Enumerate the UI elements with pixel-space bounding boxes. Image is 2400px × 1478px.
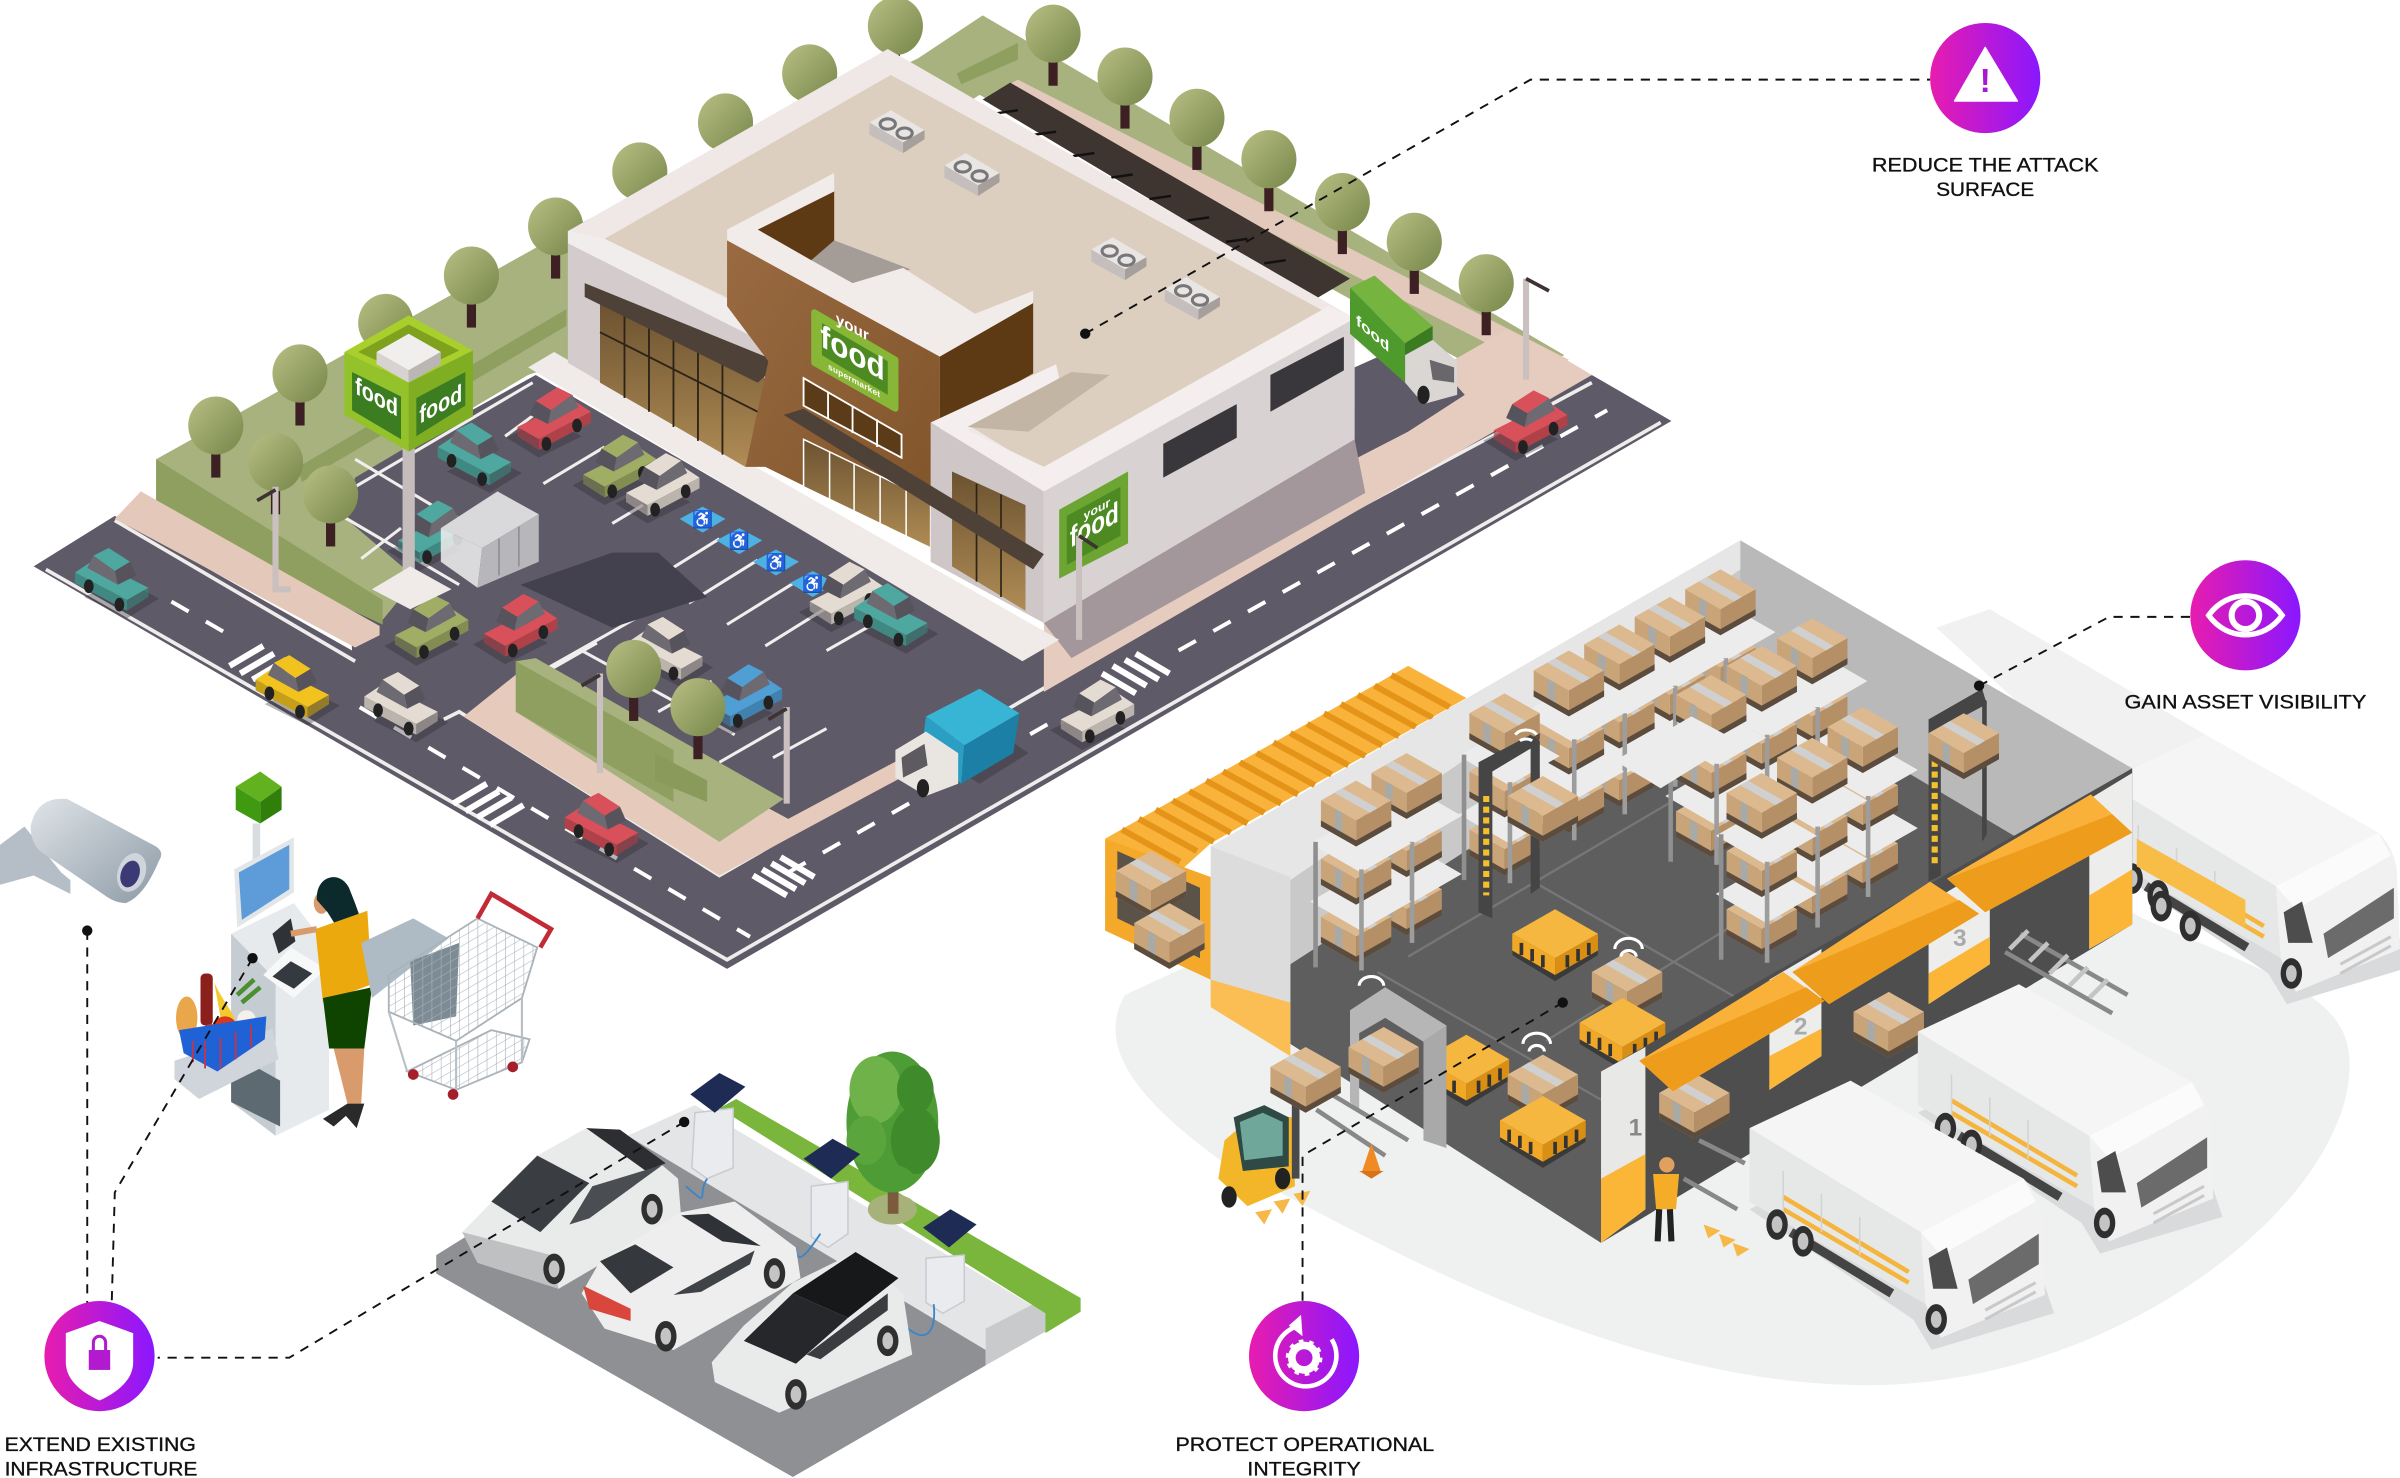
- connector: checkout: [112, 953, 258, 1303]
- shopper: [291, 877, 372, 1128]
- green delivery truck: food: [1356, 311, 1389, 356]
- callout: protect operational integrity: [1176, 1301, 1434, 1456]
- grocery basket: [176, 973, 266, 1071]
- wifi signals: [1359, 730, 1642, 1052]
- lower planting island: [464, 673, 918, 876]
- security camera: [0, 799, 161, 903]
- forklift: [1218, 1047, 1341, 1208]
- connector: reduce the attack surface: [1080, 80, 1930, 339]
- panel: supermarket scene: [34, 0, 1671, 969]
- kiosk screen: [234, 837, 294, 928]
- EV charging scene: [436, 1052, 1081, 1477]
- chargers: [686, 1073, 977, 1335]
- callout: gain asset visibility: [2124, 560, 2367, 714]
- dock awnings: [1639, 794, 2132, 1091]
- island trees and lamp posts: [248, 279, 1549, 804]
- label: REDUCE THE ATTACK: [1872, 155, 2099, 176]
- kiosk pole and cube: [253, 823, 260, 869]
- icon: gear with arrow: [1249, 1301, 1359, 1411]
- food sign on facade: supermarket: [828, 361, 880, 399]
- pylon food sign: food: [419, 378, 462, 430]
- food sign on side wall: your: [1084, 495, 1110, 523]
- food sign on facade: food: [820, 318, 885, 389]
- robots carrying boxes: [1348, 909, 1665, 1168]
- pylon food sign: food: [355, 371, 398, 423]
- accessible parking bays: ♿: [802, 573, 823, 593]
- tree: [846, 1052, 940, 1225]
- food sign on side wall: [1059, 471, 1128, 579]
- connector: EV charging: [158, 1117, 689, 1358]
- worker: [1653, 1157, 1679, 1241]
- pylon food sign: [344, 315, 473, 609]
- traffic cone: [1359, 1143, 1384, 1179]
- zebra crossings: [230, 646, 1169, 895]
- trees: [188, 0, 1514, 478]
- roof vents: [869, 110, 1220, 320]
- EV car 3: [712, 1252, 912, 1413]
- supermarket building: [568, 49, 1355, 623]
- accessible parking bays: ♿: [766, 552, 786, 572]
- panel: warehouse scene: [1105, 540, 2400, 1385]
- accessible parking bays: [680, 507, 836, 597]
- callout: reduce the attack surface: [1872, 23, 2099, 176]
- food sign on facade: [814, 310, 895, 409]
- garbage truck: [895, 689, 1029, 797]
- asphalt roads and parking lot: [34, 375, 1671, 969]
- EV car 1: [462, 1128, 681, 1289]
- accessible parking bays: ♿: [692, 509, 713, 529]
- orange container: [1105, 666, 1466, 980]
- hedge: [156, 459, 383, 625]
- right sidewalk and loading bay: [1044, 329, 1592, 692]
- white plinth: [528, 352, 1059, 661]
- label: EXTEND EXISTING: [5, 1435, 196, 1456]
- icon: eye: [2190, 560, 2301, 670]
- dock wall and openings: 1: [1629, 1115, 1642, 1142]
- label: PROTECT OPERATIONAL: [1176, 1435, 1434, 1456]
- icon: warning triangle: !: [1980, 63, 1991, 100]
- ground blob: [1115, 796, 2350, 1385]
- connector: gain asset visibility: [1974, 617, 2190, 691]
- back service strip: [995, 80, 1569, 373]
- sidewalk left: [115, 491, 380, 647]
- road edge lines: [46, 383, 1661, 960]
- connector: protect operational integrity: [1303, 997, 1568, 1301]
- grass strip: [719, 1099, 1081, 1333]
- road centre dashes: [171, 410, 1607, 937]
- label: GAIN ASSET VISIBILITY: [2124, 693, 2367, 714]
- dock boxes and conveyors: [1316, 931, 2128, 1209]
- EV car 2: [582, 1202, 801, 1352]
- food sign on side wall: food: [1070, 495, 1119, 555]
- connector: camera: [82, 925, 92, 1303]
- sidewalk: [628, 1105, 1045, 1350]
- callout: extend existing infrastructure: [5, 1301, 196, 1456]
- accessible parking bays: ♿: [729, 530, 750, 550]
- brown centre block: [727, 233, 940, 553]
- centre windows and canopy: [804, 378, 902, 458]
- kiosk body: [231, 903, 329, 1136]
- warehouse shell: [1211, 540, 2132, 1243]
- scanning gates: [1350, 689, 1999, 1110]
- parking slab: [436, 1136, 986, 1477]
- right wing: [931, 422, 1044, 623]
- dock wall and openings: [1601, 768, 2132, 1243]
- dock wall and openings: 3: [1953, 925, 1967, 952]
- self checkout scene: [174, 771, 551, 1136]
- parking markings: [344, 383, 872, 762]
- parked and moving cars: [75, 387, 1567, 863]
- basket shelf: [174, 1029, 279, 1099]
- left wing: [568, 243, 765, 467]
- conveyor: [361, 918, 448, 998]
- label continuation: SURFACE: [1936, 180, 2034, 201]
- floor arrows: [1255, 1191, 1749, 1257]
- cart shelter: [441, 491, 539, 588]
- icon: warning triangle: [1930, 23, 2040, 133]
- truck 3 behind warehouse: [1936, 609, 2400, 1004]
- building shadow on lot: [520, 553, 707, 628]
- green delivery truck: [1350, 276, 1457, 404]
- upper lawn strip: [156, 15, 1564, 620]
- trucks at dock: [1749, 984, 2222, 1350]
- dock wall and openings: 2: [1794, 1014, 1807, 1041]
- shelves with boxes: [1310, 569, 1918, 970]
- shopping cart: [389, 894, 551, 1100]
- food sign on facade: your: [836, 310, 869, 345]
- icon: shield with lock: [44, 1301, 155, 1411]
